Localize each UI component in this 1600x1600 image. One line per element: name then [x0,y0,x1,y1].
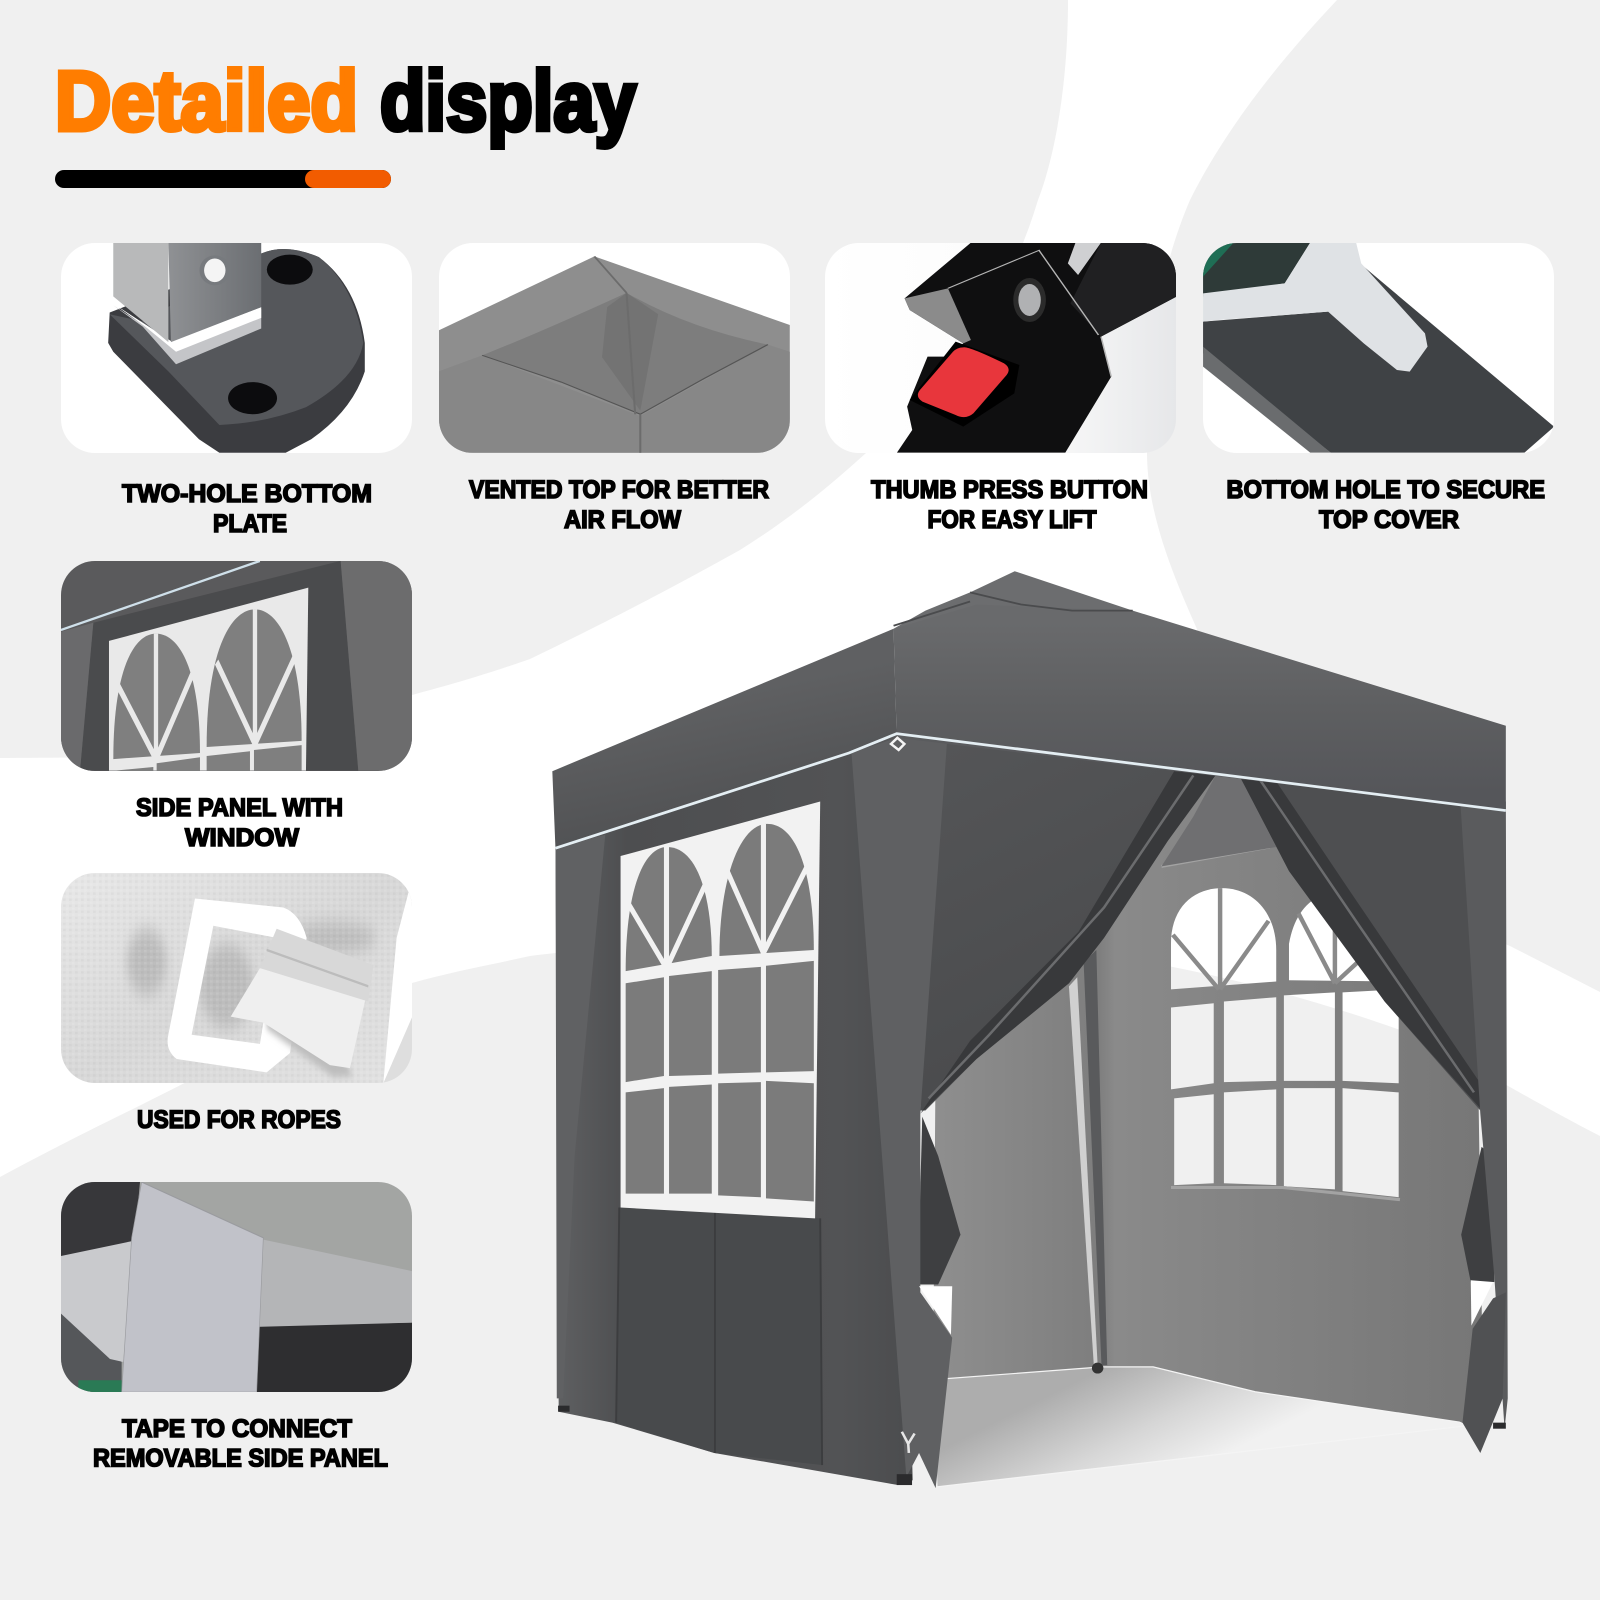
tent corner pole [1069,950,1107,1374]
panel: used for ropes [61,873,412,1083]
icon: square post [113,243,168,342]
icon: white D ring [168,898,307,1072]
white cut-outs at the curtain hem [919,1280,1493,1335]
icon: black frame body [897,243,1177,453]
bottom hook [902,1432,915,1453]
canopy roof [552,571,1506,850]
label: thumb press button: THUMB PRESS BUTTON [871,476,1148,504]
label: side panel with window: WINDOW [185,824,299,852]
icon: side wall [80,561,358,771]
icon: fabric weave [61,873,412,1083]
label: two-hole bottom plate: TWO-HOLE BOTTOM [122,480,372,508]
front corner strip [851,729,952,1488]
panel: bottom hole [1203,243,1554,453]
icon: red button [910,342,1019,427]
label: side panel with window [136,794,343,852]
left side wall [556,732,913,1485]
label: tape to connect [93,1415,388,1472]
label: thumb press button: FOR EASY LIFT [928,506,1096,534]
label: side panel with window: SIDE PANEL WITH [136,794,343,822]
tied curtain tail left [918,1117,961,1284]
tied curtain tail right [1461,1147,1494,1282]
icon: base plate [108,249,365,453]
label: tape to connect: REMOVABLE SIDE PANEL [93,1444,388,1472]
icon: rope strap [264,1024,352,1080]
label: tape to connect: TAPE TO CONNECT [122,1415,352,1443]
icon: window arches [113,609,302,771]
icon: dark pole upper [61,1182,140,1256]
label: bottom hole: BOTTOM HOLE TO SECURE [1226,476,1545,504]
tent illustration [552,571,1508,1488]
left window [621,801,820,1218]
label: two-hole bottom plate [122,480,372,538]
icon: mounting holes [228,255,313,414]
right curtain bottom flap [1462,1292,1506,1453]
tent floor [933,1367,1468,1487]
left curtain drape [920,732,1216,1114]
icon: front velcro band [122,1182,263,1392]
icon: dark pole lower [257,1323,412,1392]
tent back wall with see-through window [933,732,1484,1429]
icon: white corner [383,889,412,1083]
bottom feet [558,1406,1506,1485]
icon: screw [1013,278,1046,322]
panel: tape to connect [61,1182,412,1392]
label: thumb press button [871,476,1148,534]
title: Detailed [55,54,358,148]
icon: window frame [109,588,308,771]
right curtain drape [1241,779,1482,1111]
icon: silver collar [113,305,261,364]
panel: vented top [439,243,790,453]
background white swoosh [0,0,1600,1177]
title underline bar [55,170,391,188]
label: bottom hole [1226,476,1545,534]
canopy piping [556,734,1506,848]
icon: roof vent flap [482,293,768,414]
canopy D-ring [891,738,904,750]
icon: rear velcro band [257,1240,412,1327]
icon: canopy roof [439,256,790,453]
label: vented top [469,476,769,534]
label: bottom hole: TOP COVER [1319,506,1459,534]
label: used for ropes: USED FOR ROPES [137,1106,341,1134]
icon: fabric shadows [127,923,377,1029]
icon: dark foot plate [1203,267,1554,453]
panel: two-hole bottom plate [61,243,412,453]
panel: thumb press button [825,243,1177,453]
panel: side panel with window [61,561,412,771]
label: two-hole bottom plate: PLATE [213,510,287,538]
icon: piping [61,561,260,630]
icon: white Y connector [1203,243,1428,372]
title: display [380,54,636,148]
label: vented top: AIR FLOW [564,506,681,534]
title [55,54,636,148]
right corner strip [1460,795,1508,1429]
label: vented top: VENTED TOP FOR BETTER [469,476,769,504]
icon: dark corner [1203,243,1310,297]
